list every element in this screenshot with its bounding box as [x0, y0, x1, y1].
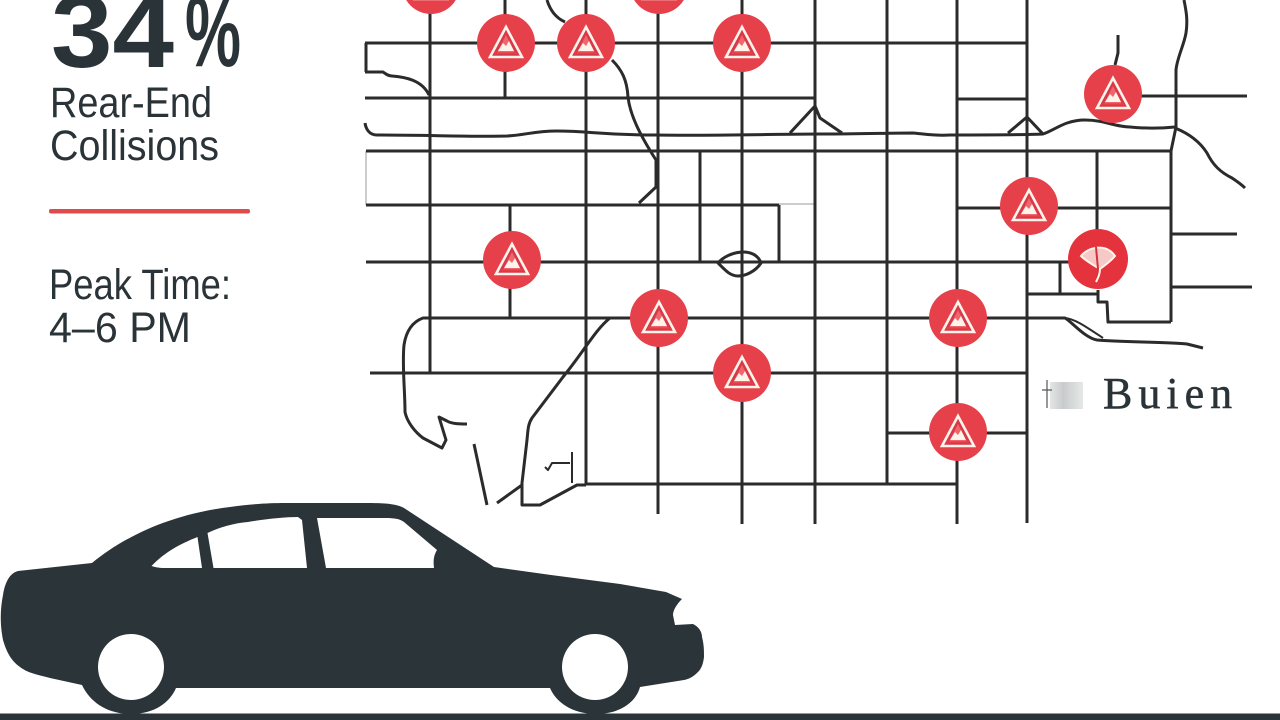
ground line [0, 714, 1280, 720]
light map edges [366, 151, 815, 205]
stat: 34% rear-end collisions [50, 0, 241, 170]
car silhouette [1, 503, 704, 714]
legend swatch [1042, 380, 1083, 409]
street map [365, 0, 1252, 524]
marker [1000, 177, 1058, 235]
vertical streets [366, 0, 1171, 524]
peak time text: 4–6 PM [49, 304, 191, 352]
big number 34% [51, 0, 241, 90]
curved streets and river [365, 72, 429, 95]
stat label: Rear-End [50, 79, 212, 127]
legend: Buien [1042, 369, 1238, 418]
marker [713, 14, 771, 72]
red divider [49, 209, 250, 214]
peak time text: Peak Time: [49, 261, 231, 309]
marker [557, 14, 615, 72]
marker [630, 289, 688, 347]
marker [929, 289, 987, 347]
stat label [50, 79, 219, 170]
marker [630, 0, 688, 14]
peak time text [49, 261, 231, 352]
marker [483, 231, 541, 289]
marker [713, 344, 771, 402]
horizontal streets [365, 43, 1252, 484]
marker [477, 14, 535, 72]
marker [929, 403, 987, 461]
legend label: Buien [1103, 369, 1238, 418]
accident markers [402, 0, 1142, 461]
marker: distorted icon [1068, 229, 1128, 289]
stat label: Collisions [50, 122, 219, 170]
marker [1084, 65, 1142, 123]
marker [402, 0, 460, 14]
